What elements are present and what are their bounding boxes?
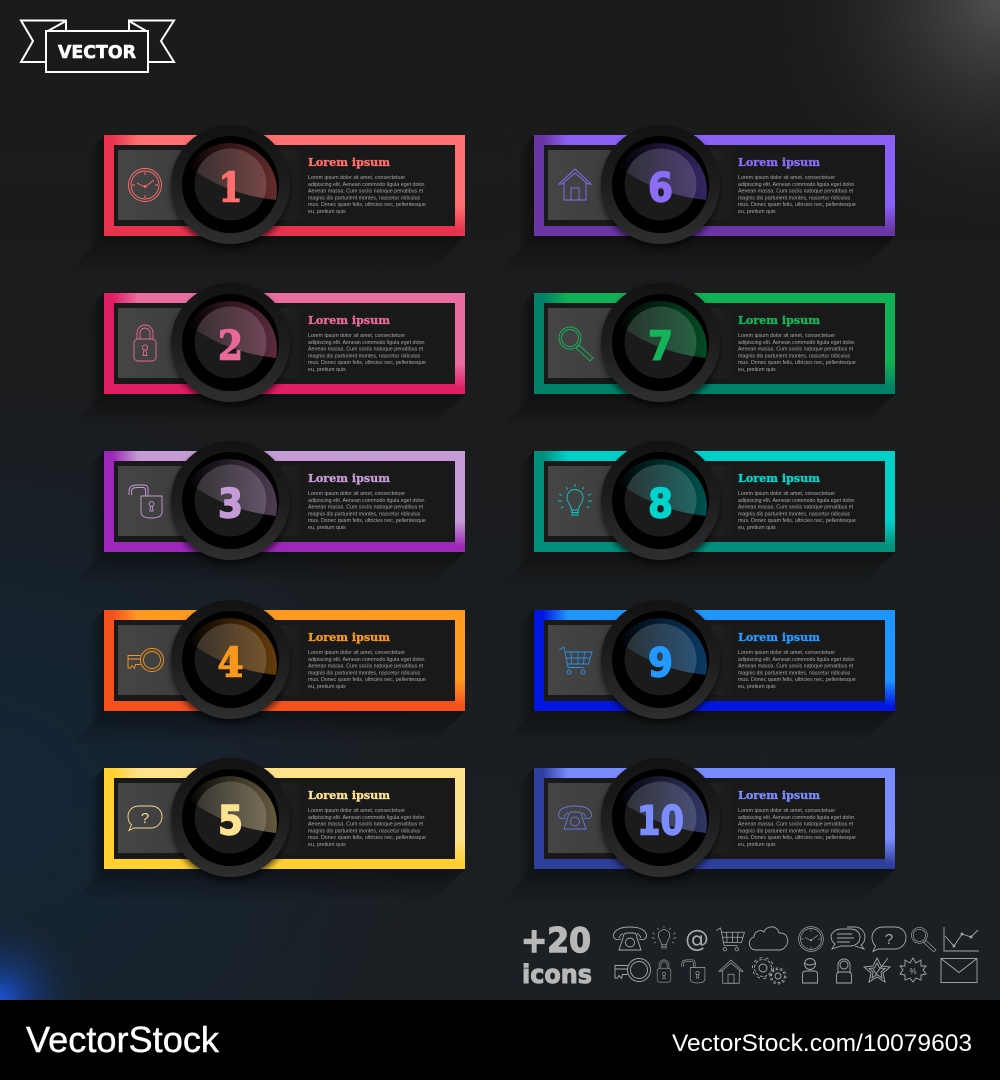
body text: adipiscing elit. Aenean commodo ligula eget dolor. [738, 498, 856, 504]
icon: badge [900, 958, 926, 982]
lens with number 9 [600, 600, 720, 724]
icon: open lock [129, 485, 162, 518]
body text: Lorem ipsum dolor sit amet, consectetuer [738, 333, 835, 339]
panel 6: house [534, 125, 895, 248]
lens with number 8: 8 [648, 482, 673, 528]
icon: question bubble [128, 806, 162, 830]
icon: house [719, 960, 743, 983]
vector ribbon badge: VECTOR [58, 42, 136, 63]
body text: mus. Donec quam felis, ultricies nec, pellentesque [738, 677, 856, 683]
lens with number 2 [170, 283, 290, 406]
body text: eu, pretium quis [308, 367, 346, 373]
icon: man [802, 958, 818, 983]
panel 2: lock [104, 283, 465, 406]
icon: cart [716, 928, 744, 951]
body text: Aenean massa. Cum sociis natoque penatibus et [738, 664, 854, 670]
body text: adipiscing elit. Aenean commodo ligula eget dolor. [738, 340, 856, 346]
icon: light bulb [558, 484, 592, 515]
+20 icons label: icons [522, 960, 592, 990]
heading: Lorem ipsum [308, 155, 390, 169]
heading: Lorem ipsum [308, 630, 390, 644]
heading: Lorem ipsum [738, 788, 820, 802]
lens with number 6 [600, 125, 720, 248]
lens with number 3: 3 [218, 482, 243, 528]
lens with number 10 [600, 758, 720, 882]
lens with number 10: 10 [637, 798, 684, 844]
icon: cloud [749, 927, 788, 950]
heading: Lorem ipsum [738, 313, 820, 327]
icon: woman [836, 959, 852, 983]
body text: mus. Donec quam felis, ultricies nec, pellentesque [308, 360, 426, 366]
icon: badge: % [909, 967, 917, 976]
icon: question: ? [885, 931, 893, 948]
panel 8: light bulb [534, 441, 895, 564]
body text: magnis dis parturient montes, nascetur ridiculus [738, 195, 851, 201]
body text: adipiscing elit. Aenean commodo ligula eget dolor. [738, 182, 856, 188]
body text: mus. Donec quam felis, ultricies nec, pellentesque [738, 835, 856, 841]
body text: eu, pretium quis [738, 209, 776, 215]
body text: adipiscing elit. Aenean commodo ligula eget dolor. [308, 657, 426, 663]
body text: eu, pretium quis [738, 842, 776, 848]
vector ribbon badge [21, 20, 174, 72]
body text: adipiscing elit. Aenean commodo ligula eget dolor. [738, 657, 856, 663]
body text: magnis dis parturient montes, nascetur ridiculus [308, 828, 421, 834]
lens with number 1 [170, 125, 290, 248]
body text: mus. Donec quam felis, ultricies nec, pellentesque [738, 360, 856, 366]
icon: question [872, 927, 906, 952]
body text: mus. Donec quam felis, ultricies nec, pellentesque [308, 835, 426, 841]
footer brand: VectorStock [26, 1019, 220, 1060]
body text: Lorem ipsum dolor sit amet, consectetuer [308, 808, 405, 814]
body text: adipiscing elit. Aenean commodo ligula eget dolor. [308, 815, 426, 821]
body text: Aenean massa. Cum sociis natoque penatibus et [308, 664, 424, 670]
icon: question bubble: ? [141, 810, 149, 827]
body text: magnis dis parturient montes, nascetur ridiculus [738, 828, 851, 834]
body text: adipiscing elit. Aenean commodo ligula eget dolor. [308, 498, 426, 504]
body text: mus. Donec quam felis, ultricies nec, pellentesque [738, 518, 856, 524]
body text: magnis dis parturient montes, nascetur ridiculus [308, 670, 421, 676]
lens with number 6: 6 [648, 166, 673, 212]
body text: eu, pretium quis [308, 209, 346, 215]
icon: open lock [682, 960, 705, 983]
icon: house [559, 169, 591, 200]
long shadows of the panels [69, 135, 895, 904]
body text: Lorem ipsum dolor sit amet, consectetuer [738, 650, 835, 656]
body text: magnis dis parturient montes, nascetur ridiculus [308, 353, 421, 359]
body text: mus. Donec quam felis, ultricies nec, pellentesque [738, 202, 856, 208]
icon: magnifier [911, 927, 936, 952]
body text: Lorem ipsum dolor sit amet, consectetuer [308, 333, 405, 339]
heading: Lorem ipsum [308, 471, 390, 485]
panel 1: clock [104, 125, 465, 248]
body text: eu, pretium quis [308, 842, 346, 848]
icon: clock [128, 168, 162, 202]
icon: chart [944, 927, 979, 951]
lens with number 4: 4 [218, 640, 244, 686]
icon: magnifier [559, 327, 593, 361]
icon: shopping cart [559, 647, 592, 674]
icon: gears [752, 958, 786, 984]
body text: magnis dis parturient montes, nascetur ridiculus [308, 511, 421, 517]
icon: envelope [941, 958, 977, 982]
body text: Lorem ipsum dolor sit amet, consectetuer [738, 175, 835, 181]
body text: mus. Donec quam felis, ultricies nec, pellentesque [308, 202, 426, 208]
body text: Lorem ipsum dolor sit amet, consectetuer [308, 491, 405, 497]
body text: Aenean massa. Cum sociis natoque penatibus et [308, 822, 424, 828]
icon: star [864, 958, 890, 982]
panel 7: magnifier [534, 283, 895, 406]
body text: eu, pretium quis [308, 525, 346, 531]
body text: magnis dis parturient montes, nascetur ridiculus [738, 670, 851, 676]
+20 icons label: +20 [521, 921, 591, 961]
icon: bulb [652, 926, 676, 948]
body text: magnis dis parturient montes, nascetur ridiculus [308, 195, 421, 201]
panel 10: telephone [534, 758, 895, 882]
lens with number 7: 7 [648, 324, 673, 370]
panel 9: shopping cart [534, 600, 895, 724]
panel 5: question bubble [104, 758, 465, 882]
body text: magnis dis parturient montes, nascetur ridiculus [738, 511, 851, 517]
panel 4: key [104, 600, 465, 724]
lens with number 3 [170, 441, 290, 564]
body text: adipiscing elit. Aenean commodo ligula eget dolor. [308, 340, 426, 346]
body text: Aenean massa. Cum sociis natoque penatibus et [738, 822, 854, 828]
heading: Lorem ipsum [738, 471, 820, 485]
body text: Lorem ipsum dolor sit amet, consectetuer [738, 491, 835, 497]
icon: lock [134, 325, 156, 361]
body text: Lorem ipsum dolor sit amet, consectetuer [738, 808, 835, 814]
body text: adipiscing elit. Aenean commodo ligula eget dolor. [308, 182, 426, 188]
icon: chat [831, 927, 865, 949]
body text: Aenean massa. Cum sociis natoque penatibus et [738, 189, 854, 195]
icon: key [615, 958, 650, 982]
body text: Aenean massa. Cum sociis natoque penatibus et [738, 347, 854, 353]
icon: lock [657, 960, 671, 982]
body text: eu, pretium quis [308, 684, 346, 690]
lens with number 8 [600, 441, 720, 564]
body text: adipiscing elit. Aenean commodo ligula eget dolor. [738, 815, 856, 821]
lens with number 5: 5 [218, 798, 243, 844]
body text: Lorem ipsum dolor sit amet, consectetuer [308, 650, 405, 656]
body text: eu, pretium quis [738, 684, 776, 690]
+20 icons label [521, 921, 592, 990]
icon: at sign: @ [685, 925, 709, 953]
body text: Aenean massa. Cum sociis natoque penatibus et [308, 505, 424, 511]
footer url: VectorStock.com/10079603 [672, 1030, 972, 1057]
body text: Aenean massa. Cum sociis natoque penatibus et [308, 347, 424, 353]
body text: Lorem ipsum dolor sit amet, consectetuer [308, 175, 405, 181]
heading: Lorem ipsum [738, 155, 820, 169]
body text: mus. Donec quam felis, ultricies nec, pellentesque [308, 518, 426, 524]
lens with number 5 [170, 758, 290, 882]
lens with number 9: 9 [648, 640, 673, 686]
body text: eu, pretium quis [738, 367, 776, 373]
icon: telephone [558, 806, 592, 829]
icon: telephone [613, 927, 647, 950]
body text: mus. Donec quam felis, ultricies nec, pellentesque [308, 677, 426, 683]
body text: Aenean massa. Cum sociis natoque penatibus et [308, 189, 424, 195]
body text: magnis dis parturient montes, nascetur ridiculus [738, 353, 851, 359]
lens with number 4 [170, 600, 290, 724]
heading: Lorem ipsum [738, 630, 820, 644]
heading: Lorem ipsum [308, 313, 390, 327]
body text: Aenean massa. Cum sociis natoque penatibus et [738, 505, 854, 511]
icon: clock [799, 927, 823, 951]
lens with number 2: 2 [218, 322, 243, 370]
heading: Lorem ipsum [308, 788, 390, 802]
body text: eu, pretium quis [738, 525, 776, 531]
panel 3: open lock [104, 441, 465, 564]
footer bar [0, 1000, 1000, 1080]
icon set strip [613, 925, 979, 984]
lens with number 1: 1 [218, 164, 242, 212]
lens with number 7 [600, 283, 720, 406]
icon: key [128, 648, 164, 672]
